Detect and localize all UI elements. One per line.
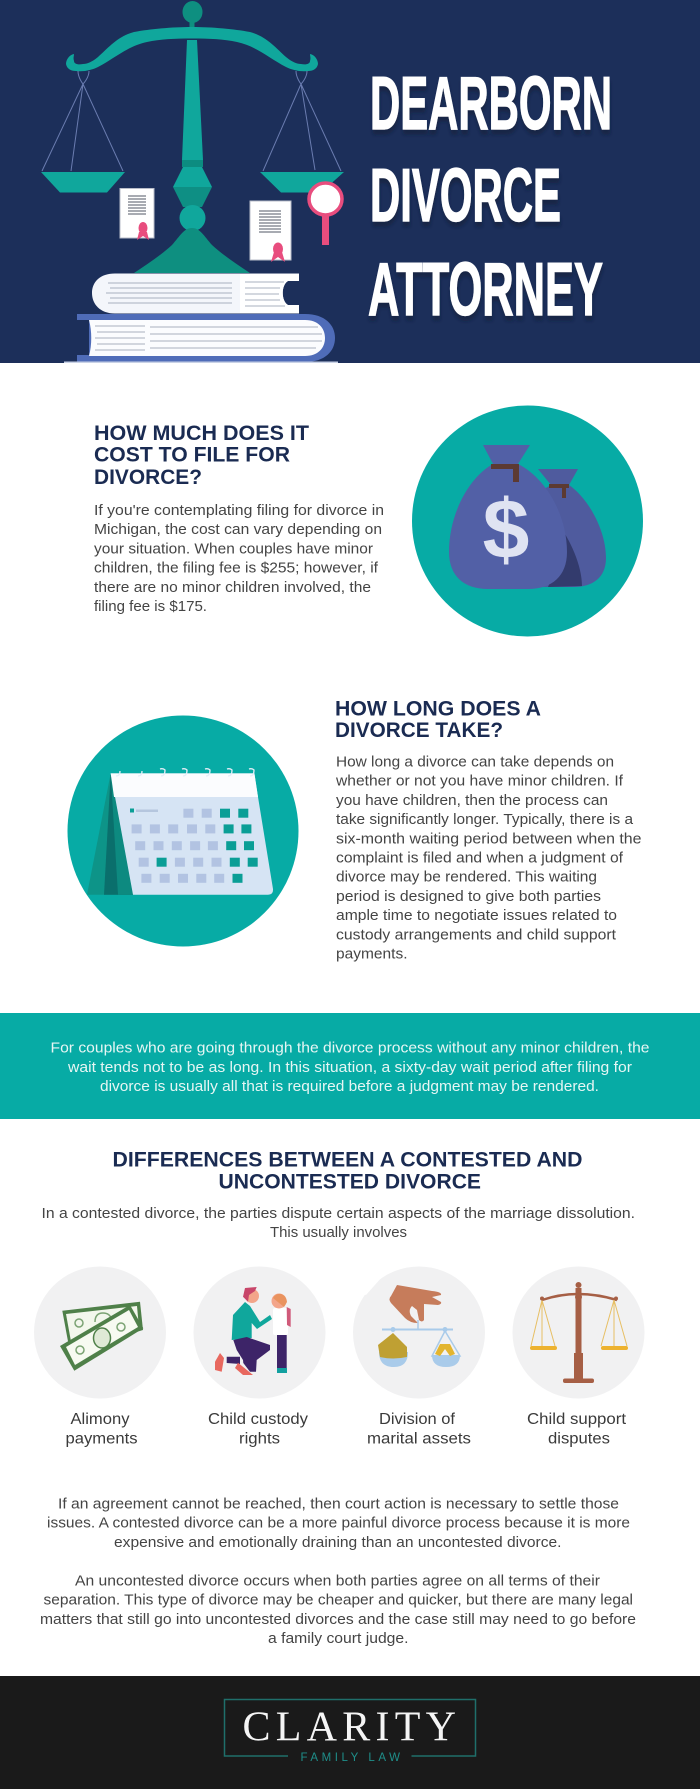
label: alimony xyxy=(66,1411,138,1448)
icon: stacked books xyxy=(64,274,338,363)
icon: dollar sign: $ xyxy=(483,482,529,576)
heading: divorce duration: DIVORCE TAKE? xyxy=(335,719,503,742)
item: alimony xyxy=(34,1266,166,1448)
text: divorce duration: How long a divorce can take depends on xyxy=(336,754,614,770)
label: support: Child support xyxy=(527,1411,627,1428)
logo: Clarity: CLARITY xyxy=(242,1704,456,1750)
label: assets: marital assets xyxy=(367,1430,471,1448)
heading: differences xyxy=(112,1148,582,1194)
logo frame xyxy=(224,1700,476,1756)
icon: hand holding balance xyxy=(378,1285,460,1367)
title xyxy=(368,61,612,331)
text: divorce duration: whether or not you have minor children. If xyxy=(335,773,624,790)
icon: banknotes xyxy=(60,1302,143,1371)
text: uncontested explanation: a family court judge. xyxy=(268,1630,408,1647)
heading: divorce duration xyxy=(335,698,541,742)
text: filing cost: filing fee is $175. xyxy=(94,598,207,615)
text: divorce duration: divorce may be rendered. This waiting xyxy=(336,869,597,886)
text: intro: In a contested divorce, the parties dispute certain aspects of the marriage dissolution. xyxy=(42,1205,635,1222)
label: alimony: payments xyxy=(66,1430,138,1448)
label: custody: rights xyxy=(239,1430,280,1448)
text: contested explanation: If an agreement cannot be reached, then court action is necessary to settle those xyxy=(58,1496,619,1512)
text: divorce duration: period is designed to give both parties xyxy=(336,888,601,905)
text: filing cost: If you're contemplating filing for divorce in xyxy=(94,502,384,519)
label: assets: Division of xyxy=(379,1411,456,1428)
text: filing cost: Michigan, the cost can vary depending on xyxy=(94,521,382,538)
text: divorce duration: payments. xyxy=(336,946,408,962)
label: alimony: Alimony xyxy=(70,1411,130,1428)
icon: calendar xyxy=(68,716,298,946)
text: uncontested explanation: matters that still go into uncontested divorces and the case still may need to go before xyxy=(40,1611,636,1628)
text: callout xyxy=(50,1040,650,1095)
logo: Family Law: FAMILY LAW xyxy=(300,1752,400,1764)
panel: divorce duration xyxy=(68,698,642,962)
footer xyxy=(0,1676,700,1789)
text: filing cost: your situation. When couples have minor xyxy=(94,540,373,557)
item: child support xyxy=(512,1266,644,1448)
text: divorce duration: complaint is filed and when a judgment of xyxy=(336,850,624,866)
item: marital assets xyxy=(350,1260,485,1448)
icon: brown scales xyxy=(530,1282,628,1383)
label: support: disputes xyxy=(548,1430,610,1448)
icon: magnifying glass xyxy=(309,183,342,245)
text: contested explanation: issues. A contested divorce can be a more painful divorce process because it is more xyxy=(47,1514,630,1532)
label: assets xyxy=(367,1411,471,1448)
text: divorce duration: custody arrangements and child support xyxy=(336,926,617,943)
text: callout: For couples who are going through the divorce process without any minor children, the xyxy=(50,1040,650,1056)
text: divorce duration xyxy=(335,754,642,962)
heading: filing cost xyxy=(94,422,309,489)
text: uncontested explanation: separation. This type of divorce may be cheaper and quicker, but there are many legal xyxy=(44,1592,633,1608)
panel: no-children callout band xyxy=(0,1013,700,1119)
text: uncontested explanation: An uncontested divorce occurs when both parties agree on all terms of their xyxy=(75,1572,600,1590)
heading: differences: DIFFERENCES BETWEEN A CONTESTED AND xyxy=(112,1148,582,1172)
heading: filing cost: COST TO FILE FOR xyxy=(94,444,290,466)
icon: money bags xyxy=(412,406,643,636)
heading: differences: UNCONTESTED DIVORCE xyxy=(218,1170,481,1194)
text: contested explanation xyxy=(47,1496,630,1551)
heading: filing cost: HOW MUCH DOES IT xyxy=(94,422,309,445)
label: support xyxy=(527,1411,627,1448)
text: divorce duration: six-month waiting period between when the xyxy=(336,830,642,847)
text: intro xyxy=(42,1205,635,1241)
icon: scales of justice xyxy=(41,1,344,273)
panel: contested vs uncontested xyxy=(34,1148,644,1647)
text: filing cost xyxy=(94,502,384,615)
text: contested explanation: expensive and emotionally draining than an uncontested divorce. xyxy=(114,1534,562,1551)
text: divorce duration: ample time to negotiate issues related to xyxy=(336,907,617,924)
icon: certificate right xyxy=(250,201,291,262)
text: uncontested explanation xyxy=(40,1572,636,1647)
text: filing cost: there are no minor children involved, the xyxy=(94,579,371,596)
header banner xyxy=(0,0,700,363)
heading: divorce duration: HOW LONG DOES A xyxy=(335,698,541,720)
icon: parent and child xyxy=(215,1287,291,1375)
label: custody: Child custody xyxy=(208,1411,308,1428)
heading: filing cost: DIVORCE? xyxy=(94,466,202,489)
text: intro: This usually involves xyxy=(270,1224,407,1241)
panel: filing cost xyxy=(94,406,643,636)
text: divorce duration: take significantly longer. Typically, there is a xyxy=(336,811,634,828)
text: filing cost: children, the filing fee is $255; however, if xyxy=(94,560,379,577)
text: callout: divorce is usually all that is required before a judgment may be rendered. xyxy=(100,1078,599,1095)
text: callout: wait tends not to be as long. In this situation, a sixty-day wait period after filing for xyxy=(67,1059,632,1076)
item: child custody xyxy=(194,1266,326,1448)
icon: certificate left xyxy=(120,188,154,240)
text: divorce duration: you have children, then the process can xyxy=(336,792,608,809)
label: custody xyxy=(208,1411,308,1448)
